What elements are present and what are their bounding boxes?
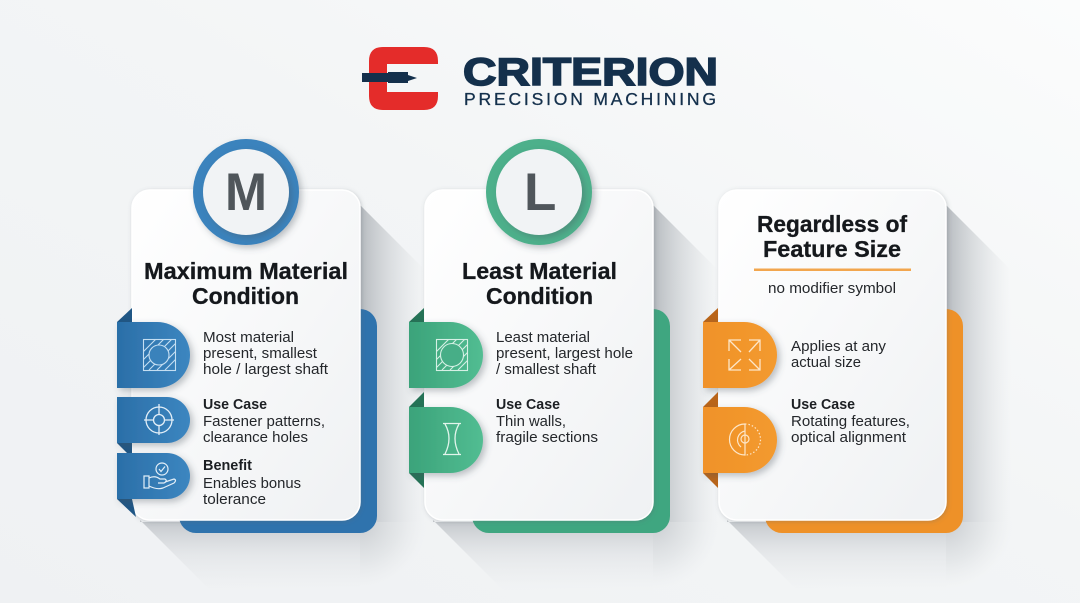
- back plate: [179, 309, 377, 533]
- heading: Condition: [486, 283, 593, 309]
- tab: use case: [703, 392, 777, 488]
- text: use case: Thin walls,: [496, 414, 566, 430]
- text: use case: fragile sections: [496, 430, 598, 446]
- tab: any size: [703, 308, 777, 388]
- badge L: [486, 139, 592, 245]
- text: use case: Use Case: [203, 397, 267, 413]
- text: material condition: / smallest shaft: [496, 362, 596, 378]
- heading: Least Material: [462, 258, 617, 284]
- text: material condition: present, smallest: [203, 346, 317, 362]
- heading: [144, 258, 348, 309]
- heading: Condition: [192, 283, 299, 309]
- icon: expand arrows: [729, 340, 760, 370]
- back plate: [765, 309, 963, 533]
- text: any size: [791, 339, 887, 371]
- text: any size: Applies at any: [791, 339, 887, 355]
- tab: use case: [117, 397, 190, 458]
- subheading: no modifier symbol: [768, 281, 896, 297]
- back plate: [472, 309, 670, 533]
- text: use case: [791, 397, 910, 446]
- logo: [362, 47, 718, 110]
- icon: red C mark with spindle: [362, 47, 438, 110]
- text: material condition: [496, 330, 633, 378]
- text: any size: actual size: [791, 355, 861, 371]
- text: use case: [203, 397, 325, 446]
- icon: hatched square with large hole: [436, 339, 471, 370]
- icon: hatched square with hole: [143, 339, 178, 370]
- icon: hand with check: [144, 463, 176, 489]
- text: benefit: Benefit: [203, 458, 252, 474]
- text: use case: Rotating features,: [791, 414, 910, 430]
- tagline: PRECISION MACHINING: [464, 89, 716, 109]
- text: use case: Use Case: [791, 397, 855, 413]
- text: material condition: [203, 330, 328, 378]
- heading: [462, 258, 617, 309]
- text: benefit: tolerance: [203, 492, 266, 508]
- text: material condition: Most material: [203, 330, 294, 346]
- badge M: [193, 139, 299, 245]
- text: use case: clearance holes: [203, 430, 308, 446]
- heading: [757, 211, 907, 262]
- icon: rotating concentric: [730, 424, 760, 455]
- tab: material condition: [117, 308, 190, 388]
- text: use case: Fastener patterns,: [203, 414, 325, 430]
- heading: Regardless of: [757, 211, 907, 237]
- tab: material condition: [409, 308, 483, 388]
- text: use case: [496, 397, 598, 446]
- icon: thin wall hourglass: [443, 424, 461, 454]
- heading: Feature Size: [763, 236, 901, 262]
- card: [719, 190, 946, 520]
- panel: least material condition: [409, 139, 719, 590]
- text: use case: optical alignment: [791, 430, 906, 446]
- badge M: M: [225, 163, 267, 222]
- text: material condition: Least material: [496, 330, 590, 346]
- tab: use case: [409, 392, 483, 488]
- heading underline: [754, 268, 911, 271]
- panel: regardless of feature size: [703, 190, 1012, 590]
- wordmark: CRITERION: [463, 51, 718, 94]
- badge L: L: [524, 163, 556, 222]
- text: material condition: hole / largest shaft: [203, 362, 328, 378]
- text: benefit: [203, 458, 301, 508]
- tab: benefit: [117, 453, 190, 517]
- panel: maximum material condition: [117, 139, 426, 590]
- text: benefit: Enables bonus: [203, 476, 301, 492]
- card: [425, 190, 653, 520]
- text: use case: Use Case: [496, 397, 560, 413]
- text: material condition: present, largest hole: [496, 346, 633, 362]
- icon: target: [144, 404, 174, 435]
- heading: Maximum Material: [144, 258, 348, 284]
- card: [132, 190, 360, 520]
